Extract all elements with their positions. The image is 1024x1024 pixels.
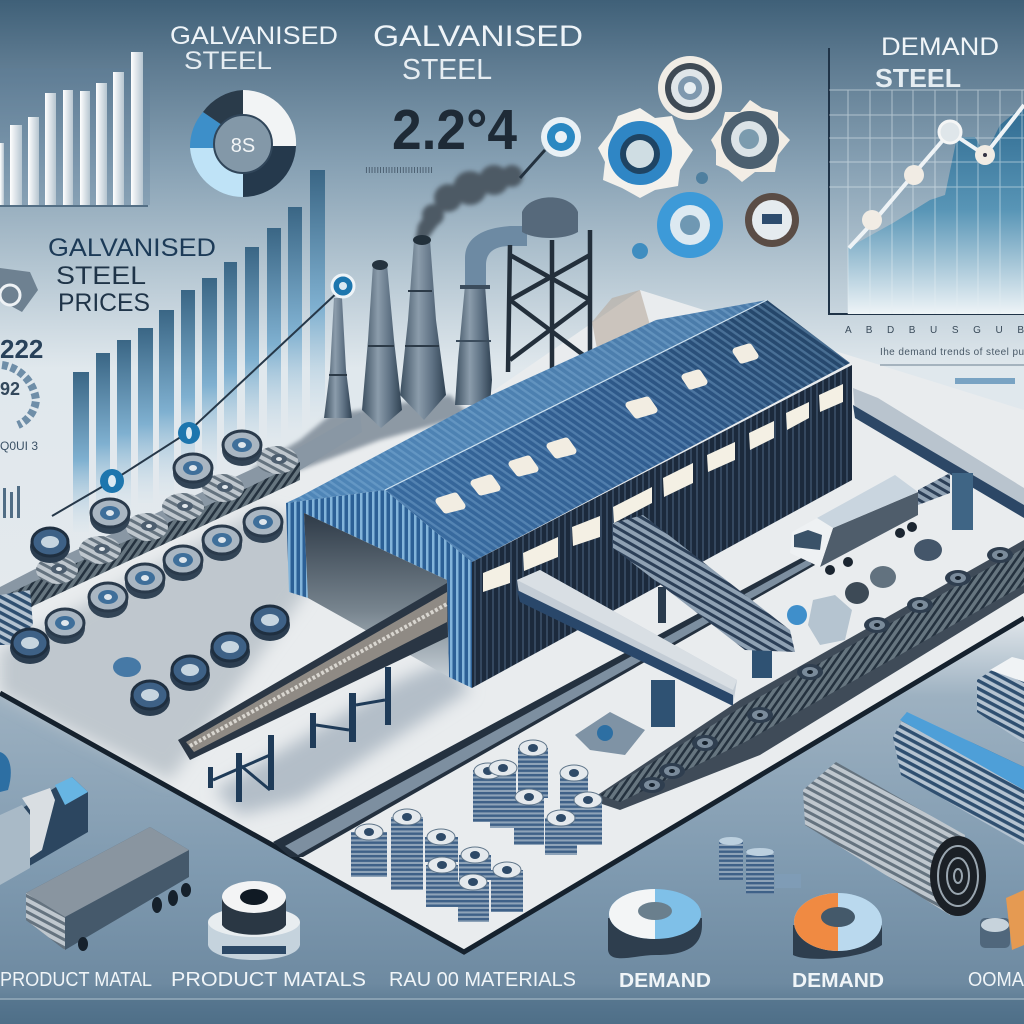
roof skylights [439, 347, 755, 510]
factory front roof slope [385, 300, 850, 562]
smokestacks [324, 226, 527, 428]
trend line with markers [52, 275, 354, 516]
small gauge: left side [0, 268, 43, 518]
smokestack base rubble [250, 395, 470, 470]
heading: galvanised steel large: GALVANISED [373, 20, 583, 53]
factory building [286, 300, 852, 688]
donut chart [190, 90, 296, 197]
heading: galvanised steel prices: STEEL [56, 262, 146, 290]
donut icon: orange blue [793, 893, 882, 959]
factory side wall [472, 365, 852, 688]
steel trailer [26, 827, 191, 951]
line and area chart: demand steel: DEMAND [881, 33, 999, 61]
truck [790, 475, 918, 575]
coil stacks: center [351, 740, 602, 922]
conveyor with coils: left [0, 413, 362, 645]
water tower [508, 197, 650, 372]
small gauge: left side: Q0UI 3 [0, 439, 38, 453]
conveyor: center bridges [517, 515, 795, 727]
factory back roof slope [286, 300, 767, 503]
conveyor: rear right [853, 388, 1024, 530]
bottom labels [0, 969, 1024, 992]
steel blocks: bottom left [0, 752, 88, 885]
label: demand: DEMAND [792, 970, 884, 992]
conveyor: center left bridge [178, 583, 448, 802]
steel ring [208, 881, 300, 960]
heading: galvanised steel small: STEEL [184, 47, 272, 75]
heading: galvanised steel large: STEEL [402, 54, 492, 86]
number: 2.2 percent: 2.2°4 [392, 98, 517, 162]
rolled steel: large [803, 762, 986, 916]
number: 2.2 percent: IIIIIIIIIIIIIIIIIIIIIIII [365, 166, 433, 175]
factory front wall [286, 490, 472, 688]
donut icon: blue white [608, 889, 702, 958]
smoke [415, 165, 523, 242]
line and area chart: demand steel: A B D B U S G U B [845, 325, 1024, 336]
rolled steel: blue [893, 657, 1024, 845]
heading: galvanised steel prices: GALVANISED [48, 234, 216, 262]
floor platform [0, 290, 1024, 952]
factory opening [304, 513, 449, 677]
machine icon: bottom right [980, 890, 1024, 950]
wall windows [483, 384, 843, 592]
line and area chart: demand steel: Ihe demand trends of steel pu [880, 347, 1024, 358]
small stacks: bottom [719, 837, 801, 894]
heading: galvanised steel prices [48, 234, 216, 317]
small gauge: left side: 92 [0, 379, 20, 399]
icon badges: circular gear icons [520, 56, 799, 259]
label: demand: DEMAND [619, 970, 711, 992]
heading: galvanised steel large [373, 20, 583, 86]
label: product material: PRODUCT MATAL [0, 969, 152, 991]
small gauge: left side: 222 [0, 334, 43, 364]
label: raw materials: RAU 00 MATERIALS [389, 969, 576, 991]
conveyor with coils: lower right [575, 539, 1024, 810]
bar chart: galvanised steel prices [73, 170, 325, 532]
number: 2.2 percent [365, 98, 517, 175]
heading: galvanised steel small [170, 22, 338, 75]
line and area chart: demand steel [829, 33, 1024, 384]
steel coils: left group [10, 431, 298, 716]
heading: galvanised steel small: GALVANISED [170, 22, 338, 50]
rail track [273, 555, 815, 857]
label: product materials: PRODUCT MATALS [171, 969, 366, 991]
heading: galvanised steel prices: PRICES [58, 289, 150, 317]
line and area chart: demand steel: STEEL [875, 63, 961, 93]
bar chart: white bars top left [0, 52, 150, 206]
donut chart: 8S [231, 135, 255, 157]
